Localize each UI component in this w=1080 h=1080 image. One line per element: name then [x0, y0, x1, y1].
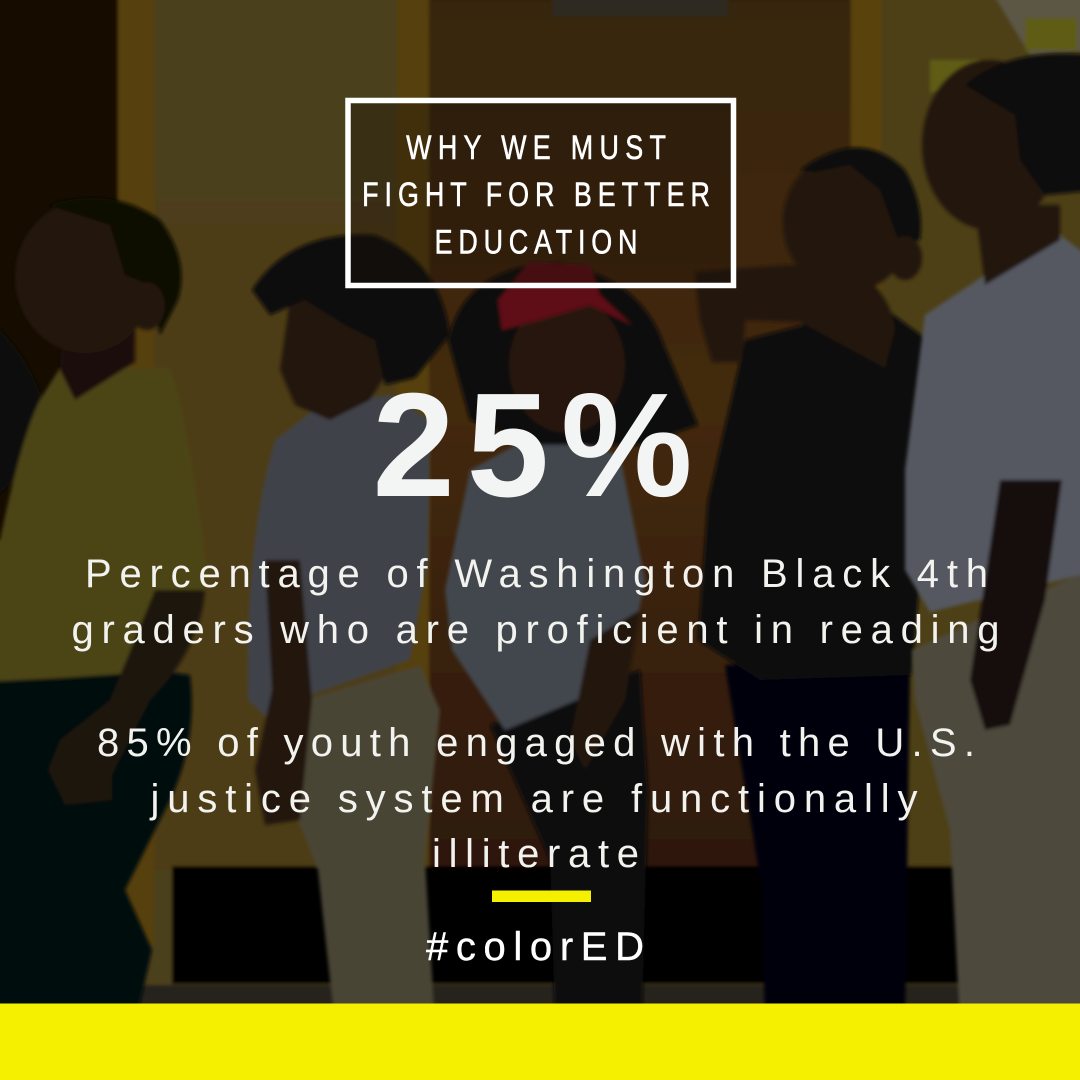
child 4: boy in black shirt with raised arm: [695, 148, 935, 1025]
title box: [348, 100, 734, 286]
hashtag: #colorED: [426, 925, 644, 969]
description: justice system literacy: [97, 721, 975, 876]
title text: EDUCATION: [435, 222, 637, 261]
title text: WHY WE MUST: [406, 128, 666, 167]
title text: [362, 128, 710, 261]
description: reading proficiency: graders who are proficient in reading: [72, 608, 1000, 652]
description: reading proficiency: Percentage of Washington Black 4th: [85, 552, 988, 596]
child 1: boy in yellow shirt: [0, 198, 207, 1025]
description: reading proficiency: [72, 552, 1000, 652]
big statistic: 25%: [372, 363, 692, 528]
description: justice system literacy: illiterate: [432, 832, 639, 876]
yellow divider: [492, 890, 591, 902]
title text: FIGHT FOR BETTER: [362, 175, 710, 214]
description: justice system literacy: 85% of youth engaged with the U.S.: [97, 721, 975, 765]
child 3: girl with red flower: [445, 262, 698, 1025]
child 2: boy in grey shirt and khaki pants: [248, 235, 450, 1025]
yellow footer band: [0, 1004, 1080, 1080]
child 5: boy in grey polo and khaki pants: [905, 54, 1080, 1025]
description: justice system literacy: justice system are functionally: [150, 777, 918, 821]
